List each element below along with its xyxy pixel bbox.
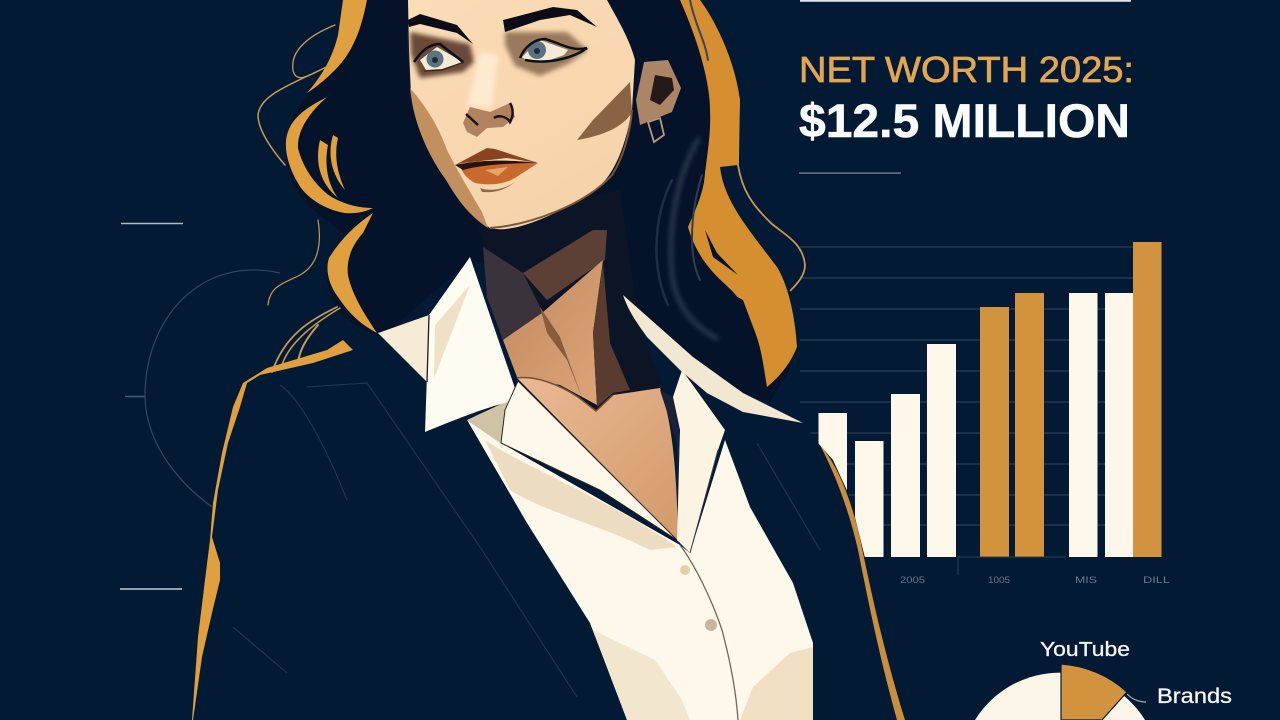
collar front: [425, 257, 519, 432]
left eye socket: [410, 32, 474, 78]
button: [680, 565, 690, 575]
chest dark right shade: [660, 390, 680, 537]
right eye: [520, 39, 587, 62]
chest: [517, 377, 678, 541]
cheek shadow: [577, 82, 632, 140]
neck shadow: [478, 190, 665, 415]
collar back: [378, 315, 429, 382]
nose: [463, 103, 515, 137]
fold edge line: [690, 450, 718, 553]
heading: net worth: [799, 0, 1134, 174]
button: [705, 619, 717, 631]
axis labels: 1005: [988, 575, 1010, 585]
pie label: brands: Brands: [1157, 685, 1232, 708]
top rule: [800, 0, 1131, 2]
neck light: [503, 260, 603, 405]
jacket: [192, 333, 905, 720]
left collar: [378, 257, 677, 540]
collarbone: [517, 377, 613, 411]
collar shade: [434, 285, 470, 378]
right collar: [623, 295, 803, 423]
pie chart: [975, 639, 1232, 720]
lips: [455, 148, 538, 192]
pie base: [975, 673, 1145, 720]
woman illustration: [192, 0, 905, 720]
left shoulder gold edge: [192, 340, 353, 720]
jacket right: [723, 417, 905, 720]
value: 12.5 million: $12.5 MILLION: [799, 94, 1130, 147]
left eyebrow: [408, 14, 473, 44]
neck stripe: [540, 307, 583, 400]
right eyebrow: [503, 7, 597, 32]
short rule: [799, 172, 901, 174]
shirt lower left shadow: [593, 630, 690, 720]
hair mass: [286, 0, 790, 402]
right jacket gold edge: [820, 445, 905, 720]
neck grey shade: [483, 247, 543, 340]
shirt body: [467, 420, 813, 720]
right gold hair: [680, 0, 797, 387]
neck: [478, 190, 665, 415]
left gold hair strands: [286, 0, 377, 333]
axis labels: 2005: [900, 575, 925, 585]
placket line: [680, 545, 738, 720]
collar edge: [427, 315, 429, 382]
bars: [818, 242, 1162, 557]
shirt: [467, 370, 813, 720]
jaw shade: [410, 88, 488, 228]
shirt lower right shadow: [740, 647, 813, 720]
left eye: [414, 44, 464, 71]
shirt under-collar: [467, 395, 520, 445]
right hair grey bands: [656, 0, 716, 338]
face base: [408, 0, 635, 229]
nose highlight: [467, 52, 498, 108]
neck right shadow: [593, 263, 630, 407]
left lapel: [501, 381, 677, 540]
jacket left: [193, 333, 627, 720]
ear and earring: [636, 60, 681, 142]
face: [408, 0, 635, 229]
pie label: youtube: YouTube: [1040, 639, 1130, 661]
grid lines: [800, 247, 1133, 525]
axis tick: [958, 557, 1066, 575]
neck brown top: [523, 230, 607, 300]
pie gold wedge: [1061, 664, 1127, 720]
axis labels: DILL: [1143, 575, 1170, 585]
jacket seam lines: [233, 383, 820, 697]
shirt shadow under collar: [485, 440, 677, 550]
decorative left lines and circle: [120, 224, 280, 589]
right eye socket: [505, 32, 588, 76]
pie leader line: [1127, 694, 1146, 702]
label: net worth 2025: NET WORTH 2025:: [799, 49, 1134, 90]
axis labels: MIS: [1075, 575, 1097, 585]
axis labels: [900, 575, 1170, 585]
right gold outer strand: [705, 10, 805, 291]
left hair thin strands: [258, 25, 340, 372]
bar chart: [800, 242, 1170, 585]
right hair dark cuts: [705, 230, 755, 355]
right shirt fold: [673, 370, 725, 553]
jaw line right: [490, 110, 632, 228]
